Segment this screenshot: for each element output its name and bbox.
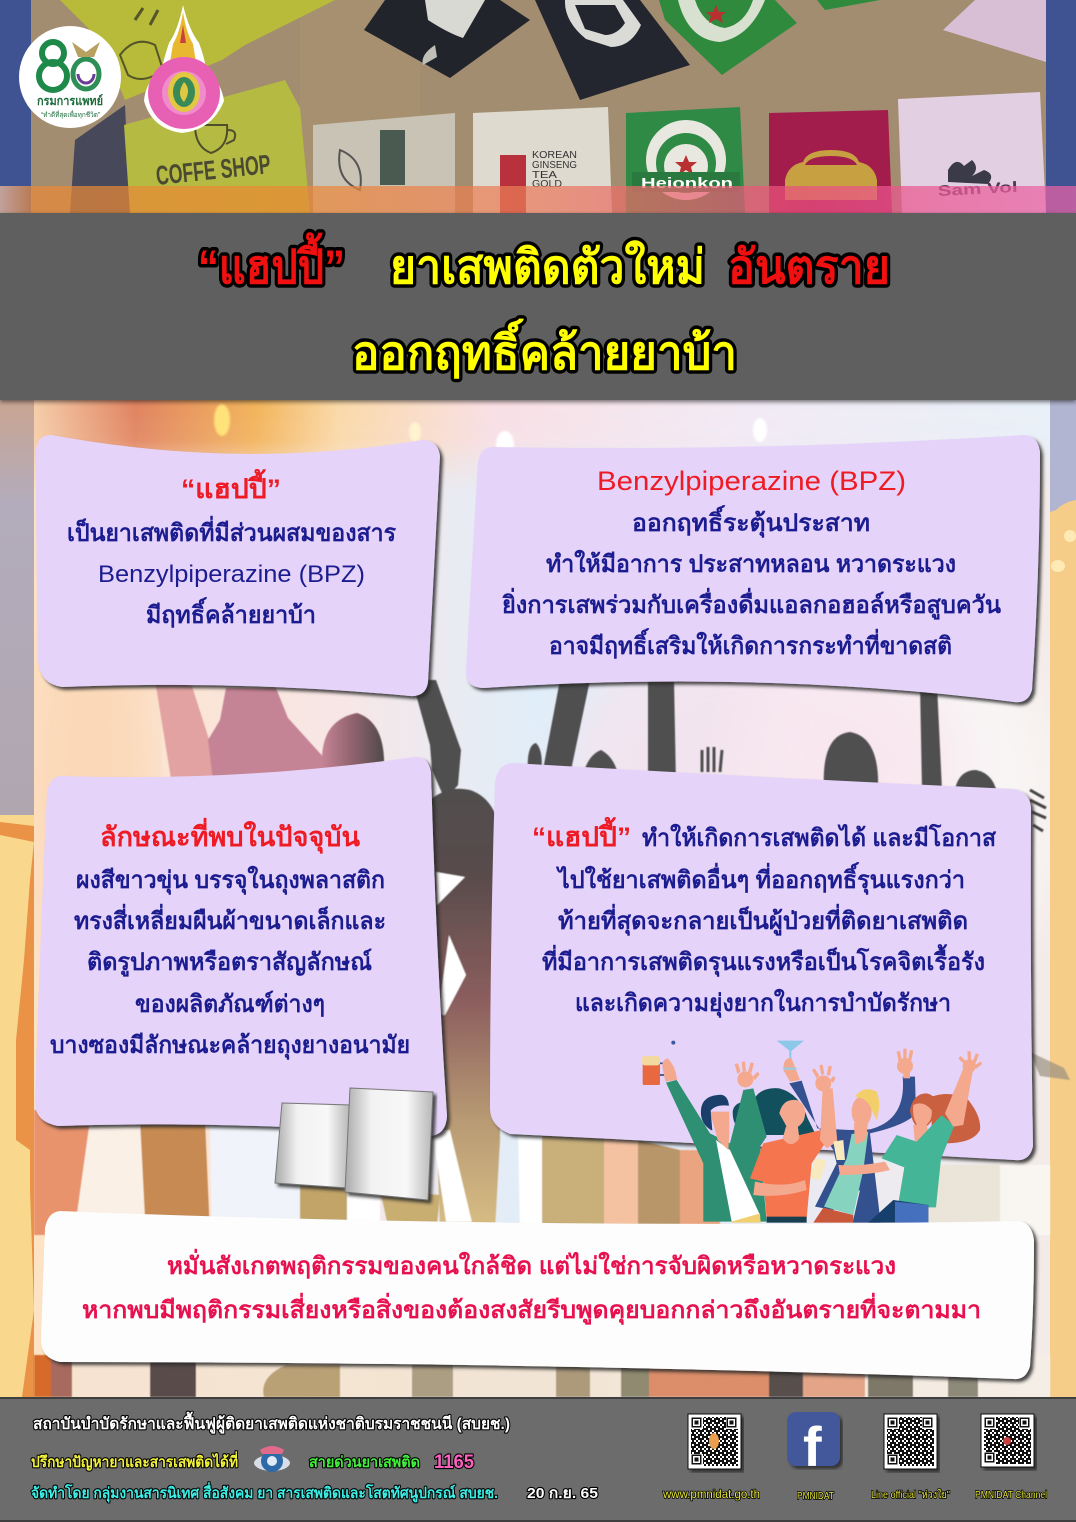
body text: Benzylpiperazine (BPZ) (98, 561, 365, 588)
institute name: สถาบันบำบัดรักษาและฟื้นฟูผู้ติดยาเสพติดแห่งชาติบรมราชชนนี (สบยช.) (33, 1411, 510, 1435)
credit line: จัดทำโดย กลุ่มงานสารนิเทศ สื่อสังคม ยา สารเสพติดและโสตทัศนูปกรณ์ สบยช. (31, 1482, 498, 1503)
woman right, red hair and green top (932, 1094, 980, 1143)
title line 1: อันตราย (728, 240, 890, 293)
body text: อาจมีฤทธิ์เสริมให้เกิดการกระทำที่ขาดสติ (549, 628, 952, 660)
body text: ทรงสี่เหลี่ยมผืนผ้าขนาดเล็กและ (74, 903, 386, 935)
body text: และเกิดความยุ่งยากในการบำบัดรักษา (575, 988, 951, 1019)
body text: ท้ายที่สุดจะกลายเป็นผู้ป่วยที่ติดยาเสพติด (558, 903, 968, 937)
icon: Facebook (787, 1412, 840, 1478)
heading: ลักษณะที่พบในปัจจุบัน (100, 817, 361, 854)
body text: ไปใช้ยาเสพติดอื่นๆ ที่ออกฤทธิ์รุนแรงกว่า (555, 862, 965, 896)
panel: what Happy is (36, 435, 440, 696)
logo: 80 years Department of Medical Services: กรมการแพทย์ (37, 94, 103, 108)
black sachet one (364, 0, 530, 78)
silhouette: dark dancers upper right (528, 680, 1070, 1080)
black sachet two (535, 0, 690, 100)
advice text (82, 1248, 981, 1326)
link labels: PMNIDAT Channel (975, 1490, 1047, 1501)
body text (67, 515, 396, 629)
title line 2: ออกฤทธิ์คล้ายยาบ้า (352, 318, 737, 379)
silhouette: dark centre dancer (412, 680, 500, 1230)
body text: ผงสีขาวขุ่น บรรจุในถุงพลาสติก (76, 865, 385, 896)
logo: Princess Mother institute crest (144, 5, 224, 133)
sachet labels: TEA (532, 170, 557, 181)
QR code: website (688, 1414, 741, 1469)
body text: “แฮปปี้” (532, 816, 631, 852)
title line 1: “แฮปปี้” (198, 232, 345, 293)
heading: Benzylpiperazine (BPZ) (597, 466, 906, 496)
link labels: www.pmnidat.go.th (662, 1487, 760, 1501)
date: 20 ก.ย. 65 (527, 1485, 598, 1502)
logo: 80 years Department of Medical Services: “ทำดีที่สุดเพื่อทุกชีวิต” (41, 110, 101, 119)
body text (50, 865, 410, 1061)
body text: มีฤทธิ์คล้ายยาบ้า (146, 597, 316, 629)
header band with title (0, 213, 1076, 400)
hotline label: สายด่วนยาเสพติด (309, 1453, 420, 1471)
upper yellow sachet (60, 0, 335, 100)
QR code: channel (981, 1414, 1034, 1467)
icon: white plastic pouches (275, 1088, 433, 1200)
row of lower sachets (313, 113, 455, 213)
advice text: หมั่นสังเกตพฤติกรรมของคนใกล้ชิด แต่ไม่ใช่การจับผิดหรือหวาดระแวง (167, 1248, 896, 1280)
hands raised (735, 1049, 982, 1091)
advice text: หากพบมีพฤติกรรมเสี่ยงหรือสิ่งของต้องสงสัยรีบพูดคุยบอกกล่าวถึงอันตรายที่จะตามมา (82, 1292, 981, 1326)
footer band (0, 1397, 1076, 1522)
title line 1: ยาเสพติดตัวใหม่ (390, 239, 705, 293)
man blue jacket (789, 1077, 916, 1223)
panel: white advice box (41, 1211, 1034, 1379)
link labels: Line official "ห่วงใย" (871, 1489, 950, 1501)
man with green jacket (666, 1080, 767, 1222)
title line 1 (198, 232, 890, 293)
sachet labels: Heionkon (641, 175, 733, 192)
green sachet upper (659, 0, 797, 75)
consult line: ปรึกษาปัญหายาและสารเสพติดได้ที่ (31, 1451, 238, 1471)
sachet labels (154, 149, 1018, 200)
sachet labels: COFFE SHOP (154, 149, 272, 191)
body text: ทำให้เกิดการเสพติดได้ และมีโอกาส (642, 823, 996, 852)
body text (532, 816, 996, 1019)
woman orange top (750, 1130, 825, 1218)
body text: เป็นยาเสพติดที่มีส่วนผสมของสาร (67, 515, 396, 547)
martini (777, 1041, 804, 1052)
body text: ออกฤทธิ์ระตุ้นประสาท (632, 505, 870, 539)
body text: ยิ่งการเสพร่วมกับเครื่องดื่มแอลกอฮอล์หรือสูบควัน (502, 587, 1002, 620)
panel: addiction risk (490, 763, 1033, 1160)
sachet labels: KOREAN (532, 150, 577, 161)
illustration: friends partying with drinks (642, 1041, 982, 1223)
body text: ของผลิตภัณฑ์ต่างๆ (135, 990, 325, 1018)
background: party scene (0, 400, 1076, 1397)
body text: ทำให้มีอาการ ประสาทหลอน หวาดระแวง (546, 549, 956, 578)
sachet labels: Sam Vol (937, 179, 1018, 200)
silhouette: legs between lower panels (34, 1110, 1050, 1235)
sachet labels: GINSENG (532, 160, 577, 171)
woman hair back (733, 1088, 816, 1135)
link labels (662, 1487, 1047, 1502)
body text: บางซองมีลักษณะคล้ายถุงยางอนามัย (50, 1032, 410, 1061)
silhouette: legs under white panel (34, 1355, 1050, 1397)
QR code: Line official (884, 1414, 937, 1469)
icon: telephone (254, 1446, 290, 1472)
panel: current forms (35, 757, 447, 1136)
pale orange to pink strip over photo (0, 186, 1076, 213)
body text (502, 505, 1002, 660)
top photo: blue side bands and drug sachets (0, 0, 1076, 213)
link labels: PMNIDAT (797, 1491, 834, 1502)
sachet labels: GOLD (532, 179, 562, 190)
heading: “แฮปปี้” (181, 468, 281, 504)
man teal shirt and head (824, 1132, 868, 1215)
body text: ที่มีอาการเสพติดรุนแรงหรือเป็นโรคจิตเรื้อรัง (542, 943, 985, 978)
body text: ติดรูปภาพหรือตราสัญลักษณ์ (87, 948, 372, 977)
hotline number: 1165 (434, 1452, 474, 1473)
beer mug (643, 1063, 660, 1085)
silhouette: pink dancers upper left (155, 680, 384, 790)
side strips (0, 400, 1076, 1397)
panel: Benzylpiperazine effects (466, 435, 1040, 702)
icon: Facebook: f (803, 1415, 822, 1478)
logo: 80 years Department of Medical Services (19, 26, 121, 128)
